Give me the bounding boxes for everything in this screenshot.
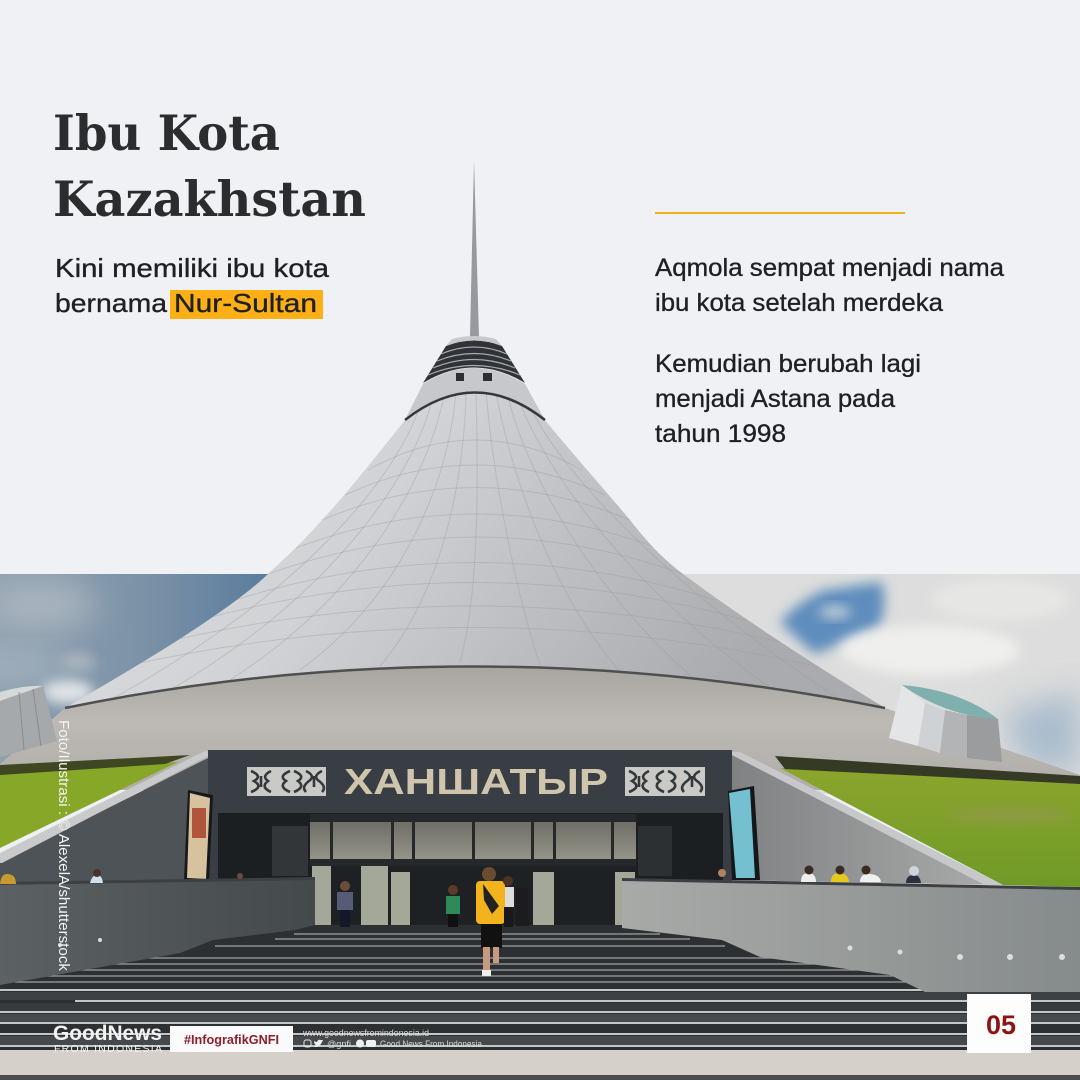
left text block: Nur-Sultan [174, 288, 317, 318]
right text block: menjadi Astana pada [655, 385, 895, 413]
poster left [184, 790, 213, 881]
white roof edge strips [0, 751, 214, 863]
people [0, 866, 921, 976]
poster right [728, 786, 760, 880]
title [53, 104, 366, 228]
top cap band [405, 368, 545, 420]
spire [470, 160, 479, 337]
footer logo: GoodNews from Indonesia: GoodNews [53, 1022, 162, 1045]
stairs [0, 925, 1080, 1050]
photo: sky and clouds [0, 574, 1080, 794]
right text block [655, 254, 1004, 448]
left text block: bernama [55, 288, 168, 318]
ornament left [247, 767, 326, 796]
right text block: Kemudian berubah lagi [655, 350, 921, 378]
left skylight [0, 686, 57, 757]
accent line [655, 212, 905, 214]
hashtag label [170, 1026, 293, 1052]
footer links and social icons: Good News From Indonesia [380, 1039, 482, 1049]
entrance walls [0, 751, 1003, 885]
other visitors [0, 866, 921, 927]
right text block: ibu kota setelah merdeka [655, 289, 943, 317]
glass front [310, 821, 636, 861]
lower disc roof [0, 666, 1080, 790]
cone ribs and hoops [114, 394, 782, 698]
page number [967, 994, 1031, 1053]
right text block: tahun 1998 [655, 420, 786, 448]
side windows [272, 826, 308, 876]
title: Ibu Kota [53, 104, 280, 162]
photo credit: Foto/Ilustrasi : © AlexelA/shutterstock [55, 720, 72, 971]
footer links and social icons [302, 1028, 482, 1049]
footer logo: GoodNews from Indonesia [53, 1022, 162, 1055]
building: khan shatyr cone [0, 160, 1080, 790]
left text block [55, 253, 330, 318]
cone roof [65, 392, 885, 708]
ornament right [625, 767, 705, 796]
page number: 05 [986, 1010, 1016, 1040]
right skylight [889, 685, 1002, 762]
top cap louvers [423, 340, 525, 383]
right text block: Aqmola sempat menjadi nama [655, 254, 1004, 282]
highlight box: Nur-Sultan [170, 290, 323, 319]
footer links and social icons: www.goodnewsfromindonesia.id [302, 1028, 429, 1038]
left text block: Kini memiliki ibu kota [55, 253, 330, 283]
footer links and social icons: @gnfi [327, 1039, 351, 1049]
hashtag label: #InfografikGNFI [184, 1032, 279, 1047]
pavement [0, 1050, 1080, 1080]
parapets [0, 877, 1080, 992]
footer logo: GoodNews from Indonesia: FROM INDONESIA [54, 1043, 162, 1055]
main visitor in yellow shirt [476, 867, 505, 976]
facade [184, 750, 760, 928]
title: Kazakhstan [53, 170, 366, 228]
grass slopes [0, 755, 1080, 887]
facade sign: ХАНШАТЫР: ХАНШАТЫР [344, 761, 608, 802]
